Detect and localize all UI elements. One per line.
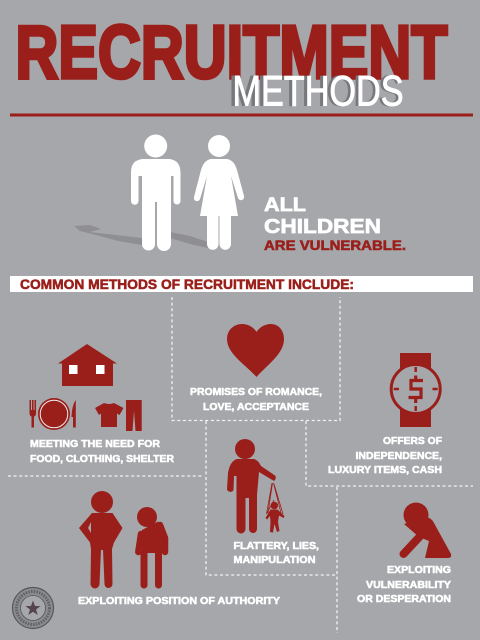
heading bar: common methods <box>10 276 473 292</box>
label: EXPLOITING POSITION OF AUTHORITY <box>78 596 280 607</box>
heading bar: common methods: COMMON METHODS OF RECRUITMENT INCLUDE: <box>20 277 354 292</box>
panel: romance, love, acceptance <box>190 324 322 413</box>
label <box>357 565 451 605</box>
icon: puppeteer and puppet <box>227 439 284 534</box>
label: PROMISES OF ROMANCE, <box>190 387 322 398</box>
subtitle: methods: METHODS <box>229 68 401 116</box>
label: FOOD, CLOTHING, SHELTER <box>30 454 175 465</box>
label: OFFERS OF <box>383 436 442 447</box>
label: LUXURY ITEMS, CASH <box>328 465 442 476</box>
subtitle: methods: METHODS <box>232 68 404 116</box>
callout: all children are vulnerable <box>264 194 406 253</box>
callout: all children are vulnerable: CHILDREN <box>264 216 381 238</box>
label: EXPLOITING <box>387 565 451 576</box>
icon: adult and child <box>79 491 165 589</box>
label: OR DESPERATION <box>357 594 451 605</box>
label: MEETING THE NEED FOR <box>30 439 161 450</box>
label <box>328 436 442 476</box>
panel: food, clothing, shelter <box>30 344 175 465</box>
panel: vulnerability or desperation <box>357 502 451 605</box>
icon: t-shirt and trousers <box>95 400 142 431</box>
panel: exploiting position of authority <box>78 491 280 607</box>
icon: two children with shadow <box>74 134 244 251</box>
label: LOVE, ACCEPTANCE <box>203 402 309 413</box>
label <box>234 541 319 566</box>
label: VULNERABILITY <box>366 580 451 591</box>
icon: attorney general seal <box>12 588 54 628</box>
icon: fork, plate and knife <box>30 398 76 430</box>
label: MANIPULATION <box>234 555 316 566</box>
icon: house <box>58 344 117 386</box>
label: FLATTERY, LIES, <box>234 541 319 552</box>
icon: dollar watch <box>391 353 440 427</box>
panel: flattery, lies, manipulation <box>227 439 319 566</box>
callout: all children are vulnerable: ALL <box>264 194 306 216</box>
callout: all children are vulnerable: ARE VULNERABLE. <box>264 237 406 253</box>
panel: independence, luxury, cash <box>328 353 442 476</box>
icon: crouching figure <box>404 502 451 558</box>
label <box>190 387 322 413</box>
icon: heart <box>227 324 284 377</box>
label <box>30 439 175 465</box>
label: INDEPENDENCE, <box>356 451 442 462</box>
